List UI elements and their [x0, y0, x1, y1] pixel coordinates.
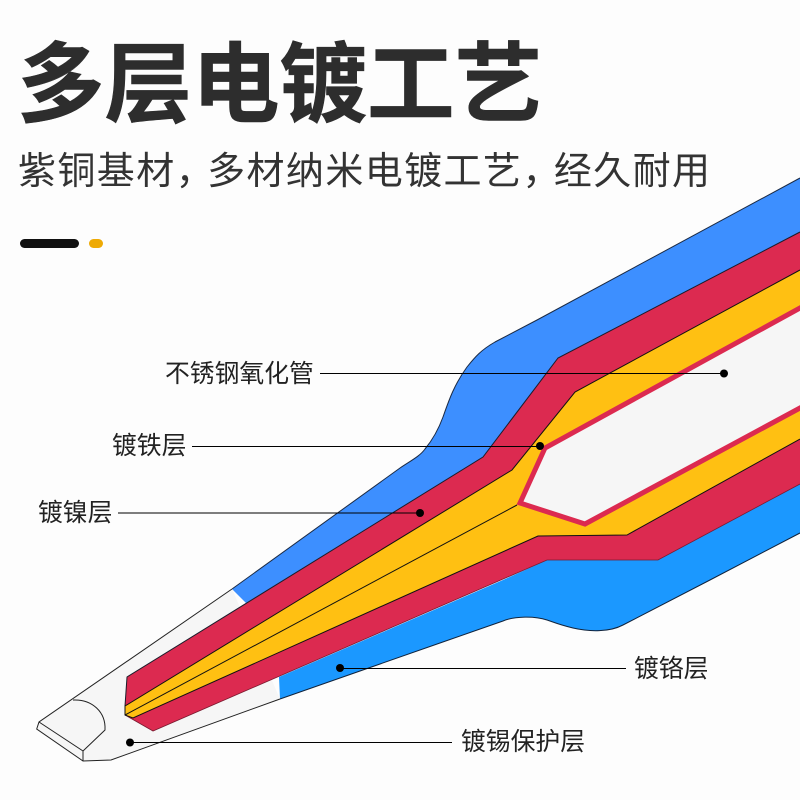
leader: chromium layer: [336, 664, 626, 672]
accent bar: yellow: [89, 239, 103, 248]
tip base: bare tin protective layer: [37, 589, 280, 761]
label: stainless steel oxidised tube: 不锈钢氧化管: [165, 361, 314, 388]
accent bar: black: [20, 239, 79, 248]
leader: tin layer: [126, 738, 452, 746]
chromium layer: lower blue band: [279, 484, 800, 699]
label: tin protective plating: 镀锡保护层: [461, 729, 585, 756]
iron layer: red band: [125, 232, 800, 731]
label: nickel plating: 镀镍层: [38, 500, 112, 527]
label: iron plating: 镀铁层: [112, 433, 186, 460]
leader: stainless steel tube: [320, 370, 728, 378]
label: chromium plating: 镀铬层: [634, 656, 708, 683]
nickel layer: yellow band: [125, 270, 800, 718]
title: 多层电镀工艺: [17, 36, 542, 134]
chromium layer: upper blue band: [232, 178, 800, 603]
subtitle: 紫铜基材，多材纳米电镀工艺，经久耐用: [18, 151, 711, 193]
leader: nickel layer: [118, 509, 424, 517]
leader: iron layer: [192, 442, 544, 450]
stainless steel oxidised core tube: [520, 302, 800, 524]
